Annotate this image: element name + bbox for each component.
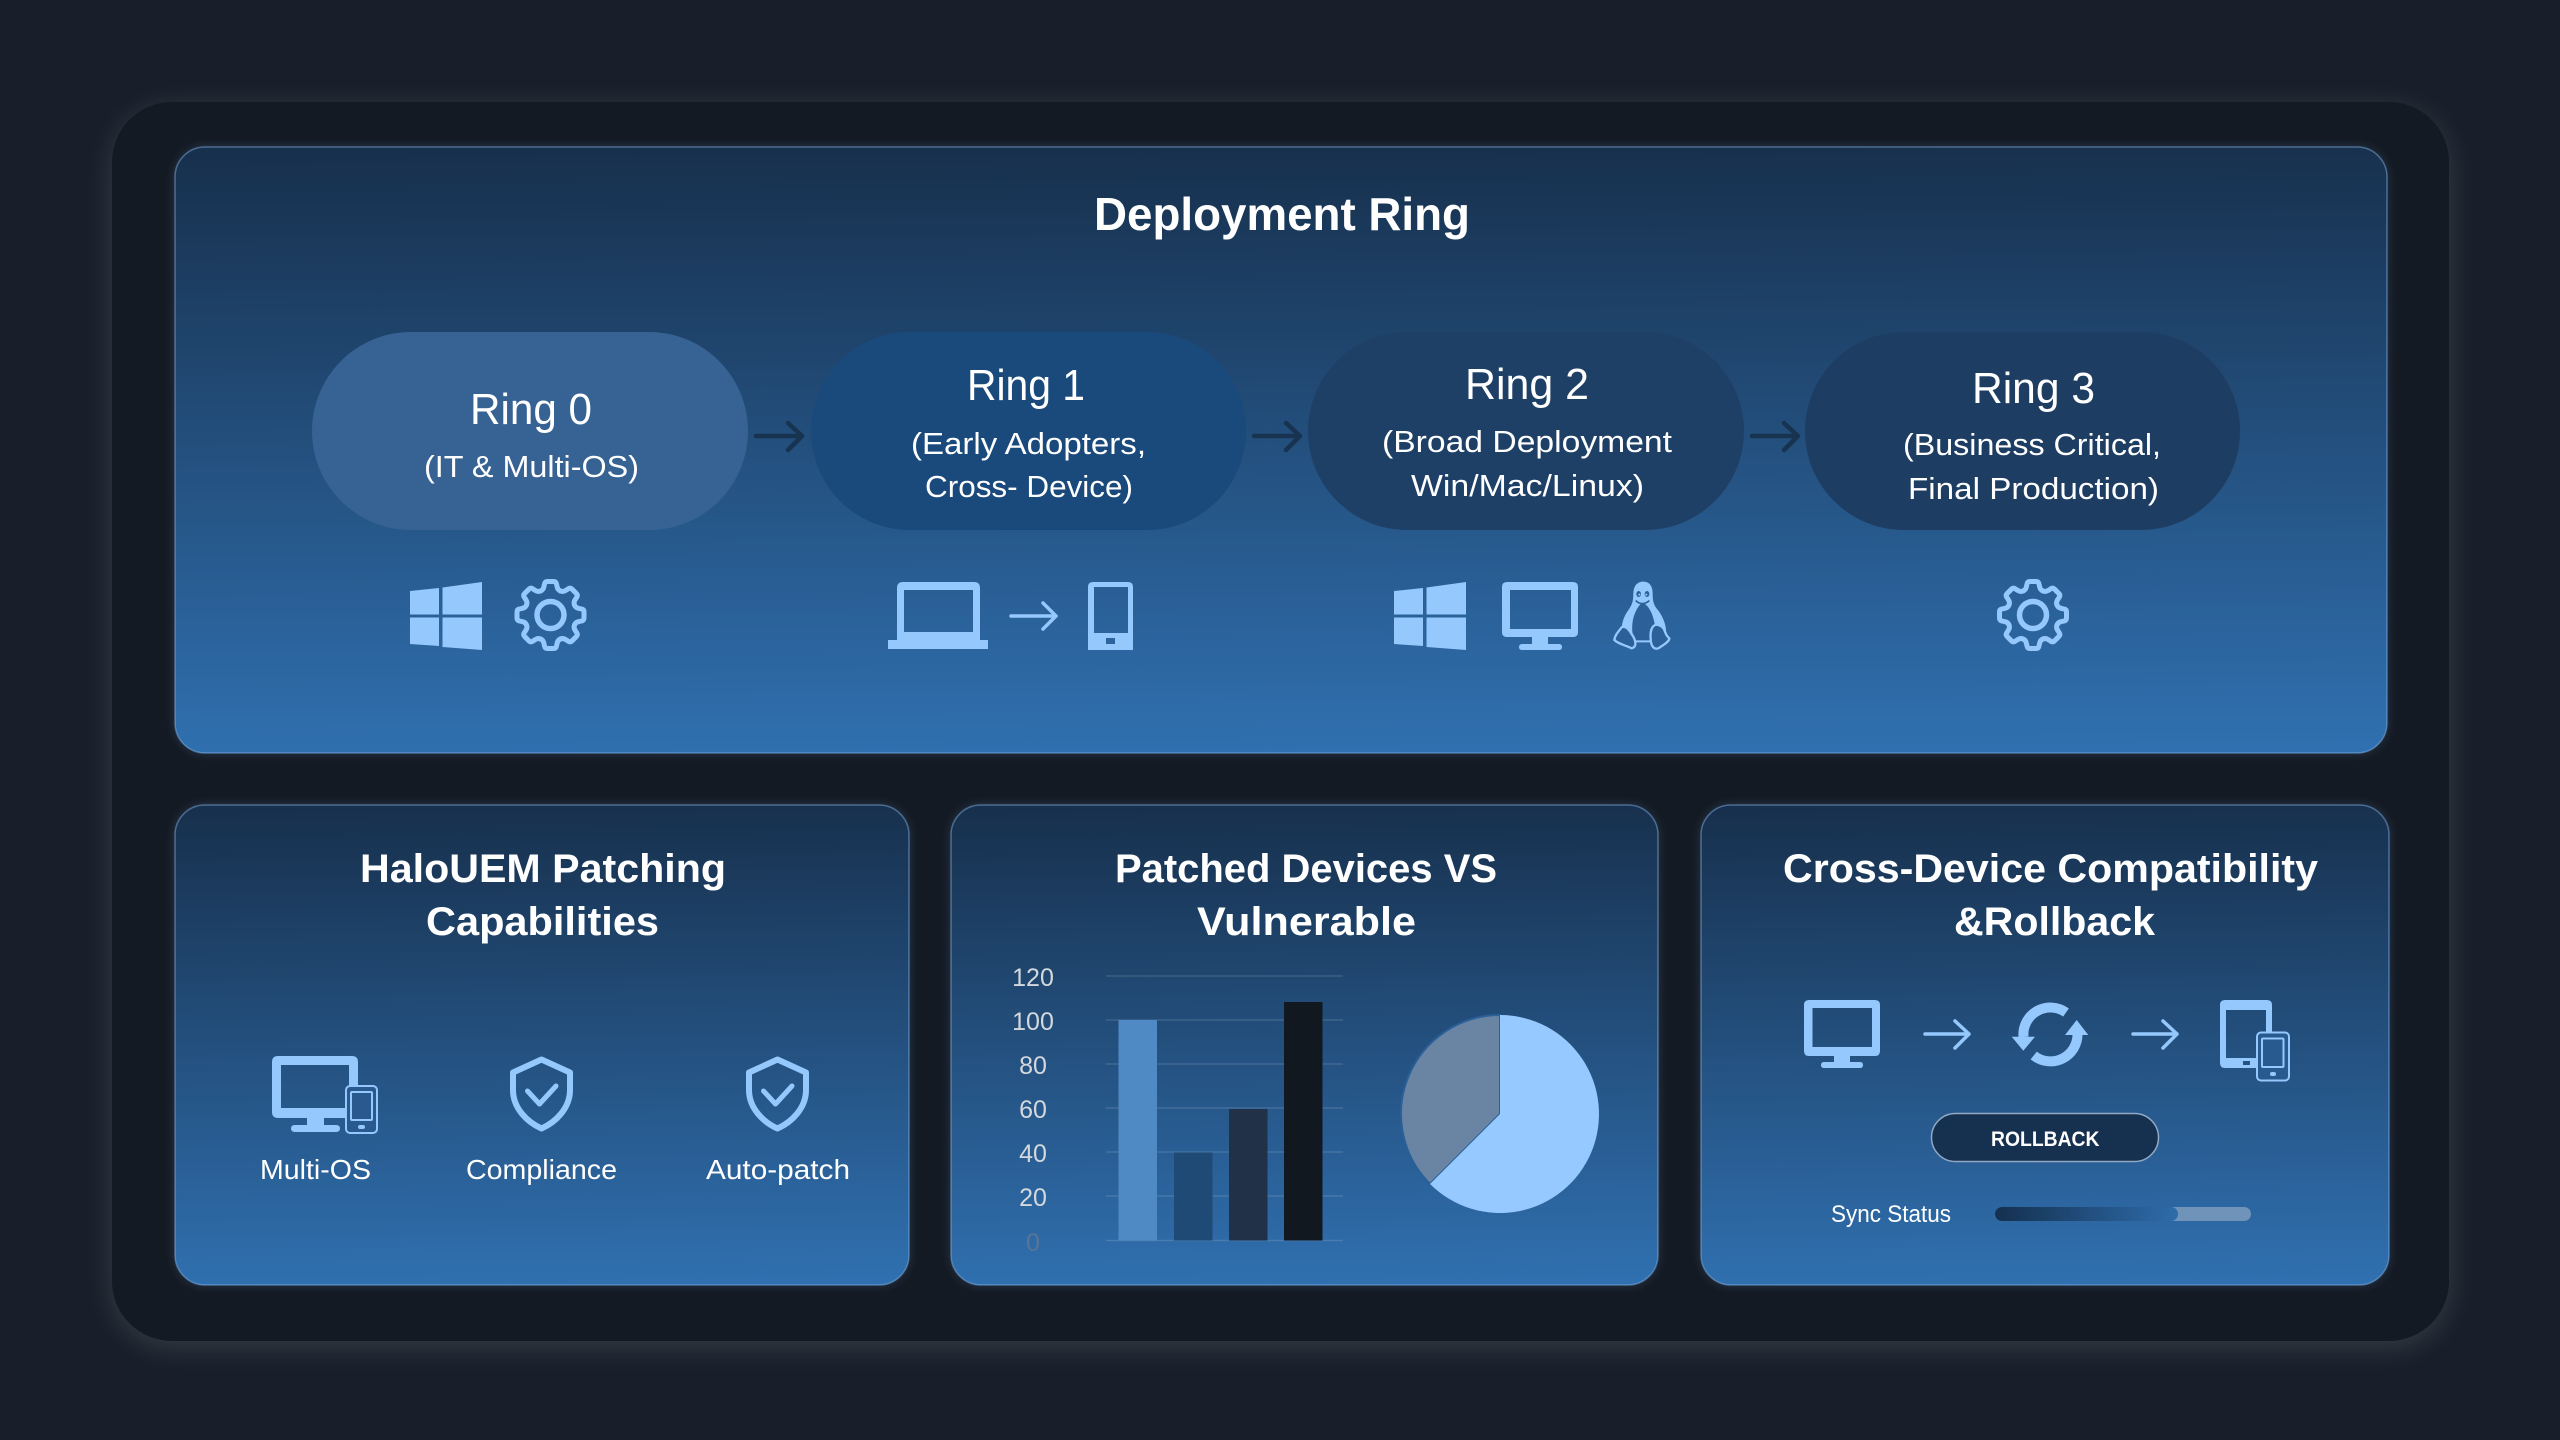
ring 1 pill: Cross- Device): [925, 469, 1133, 504]
heading: patched devices vs vulnerable: Patched Devices VS: [1115, 847, 1497, 891]
ring 0 pill: (IT & Multi-OS): [424, 449, 639, 484]
icon: windows (ring 2): [1394, 582, 1466, 650]
ring 3 pill: [1805, 332, 2240, 530]
label: compliance: Compliance: [466, 1154, 617, 1185]
bar chart: 0: [1026, 1229, 1040, 1257]
heading: cross-device compatibility: &Rollback: [1954, 900, 2156, 944]
icon: laptop: [888, 582, 988, 649]
ring 0 pill: [312, 332, 748, 530]
arrow: laptop to phone: [1011, 603, 1056, 629]
icon: shield compliance: [513, 1060, 570, 1128]
icon: tablet and phone: [2220, 1000, 2289, 1080]
panel: deployment ring: [175, 147, 2387, 753]
icon: monitor with phone: [272, 1056, 377, 1133]
ring 0 pill: Ring 0: [470, 385, 592, 434]
label: auto-patch: Auto-patch: [706, 1154, 850, 1185]
heading: cross-device compatibility: [1783, 847, 2319, 944]
ring 3 pill: (Business Critical,: [1903, 427, 2161, 462]
label: sync status: Sync Status: [1831, 1201, 1951, 1228]
ring 2 pill: [1308, 332, 1744, 530]
ring 1 pill: (Early Adopters,: [911, 426, 1146, 461]
icon: windows (ring 0): [410, 582, 482, 650]
bar chart: 20: [1019, 1184, 1047, 1212]
ring 1 pill: Ring 1: [967, 361, 1085, 410]
arrow: sync to devices: [2133, 1021, 2177, 1048]
ring 1 pill: [811, 332, 1246, 530]
arrow: monitor to sync: [1925, 1021, 1969, 1048]
icon: monitor (ring 2): [1502, 582, 1578, 650]
heading: halouem patching capabilities: [360, 847, 726, 944]
pie chart: [1401, 1015, 1599, 1213]
ring 3 pill: Final Production): [1908, 471, 2159, 506]
panel: halouem patching capabilities: [175, 805, 909, 1285]
heading: halouem patching capabilities: HaloUEM Patching: [360, 847, 726, 891]
panel: patched devices vs vulnerable: [951, 805, 1658, 1285]
panel: cross-device compatibility and rollback: [1701, 805, 2389, 1285]
label: multi-os: Multi-OS: [260, 1154, 371, 1185]
icon: linux penguin: [1614, 582, 1669, 649]
ring 3 pill: Ring 3: [1972, 364, 2095, 413]
outer frame: [112, 102, 2449, 1341]
heading: patched devices vs vulnerable: [1115, 847, 1497, 944]
icon: sync: [2012, 1008, 2088, 1061]
heading: patched devices vs vulnerable: Vulnerable: [1197, 900, 1416, 944]
icon: monitor: [1804, 1000, 1880, 1068]
heading: deployment ring: Deployment Ring: [1094, 188, 1470, 240]
bar chart: 60: [1019, 1096, 1047, 1124]
heading: cross-device compatibility: Cross-Device Compatibility: [1783, 847, 2319, 891]
arrow: ring 1 to ring 2: [1254, 423, 1300, 450]
bar chart: 80: [1019, 1052, 1047, 1080]
ring 2 pill: (Broad Deployment: [1382, 424, 1672, 459]
ring 2 pill: Win/Mac/Linux): [1411, 468, 1644, 503]
bar chart: [1012, 964, 1343, 1257]
button: rollback: ROLLBACK: [1991, 1128, 2100, 1151]
icon: gear (ring 3): [2000, 582, 2066, 648]
button: rollback: [1932, 1114, 2158, 1162]
bar chart: 100: [1012, 1008, 1054, 1036]
arrow: ring 2 to ring 3: [1752, 423, 1798, 450]
icon: shield auto-patch: [749, 1060, 806, 1128]
arrow: ring 0 to ring 1: [756, 423, 802, 450]
progress bar: sync status: [1995, 1207, 2251, 1221]
bar chart: 120: [1012, 964, 1054, 992]
heading: halouem patching capabilities: Capabilities: [426, 900, 659, 944]
icon: phone: [1088, 582, 1133, 650]
icon: gear (ring 0): [517, 582, 584, 648]
bar chart: 40: [1019, 1140, 1047, 1168]
ring 2 pill: Ring 2: [1465, 360, 1589, 409]
